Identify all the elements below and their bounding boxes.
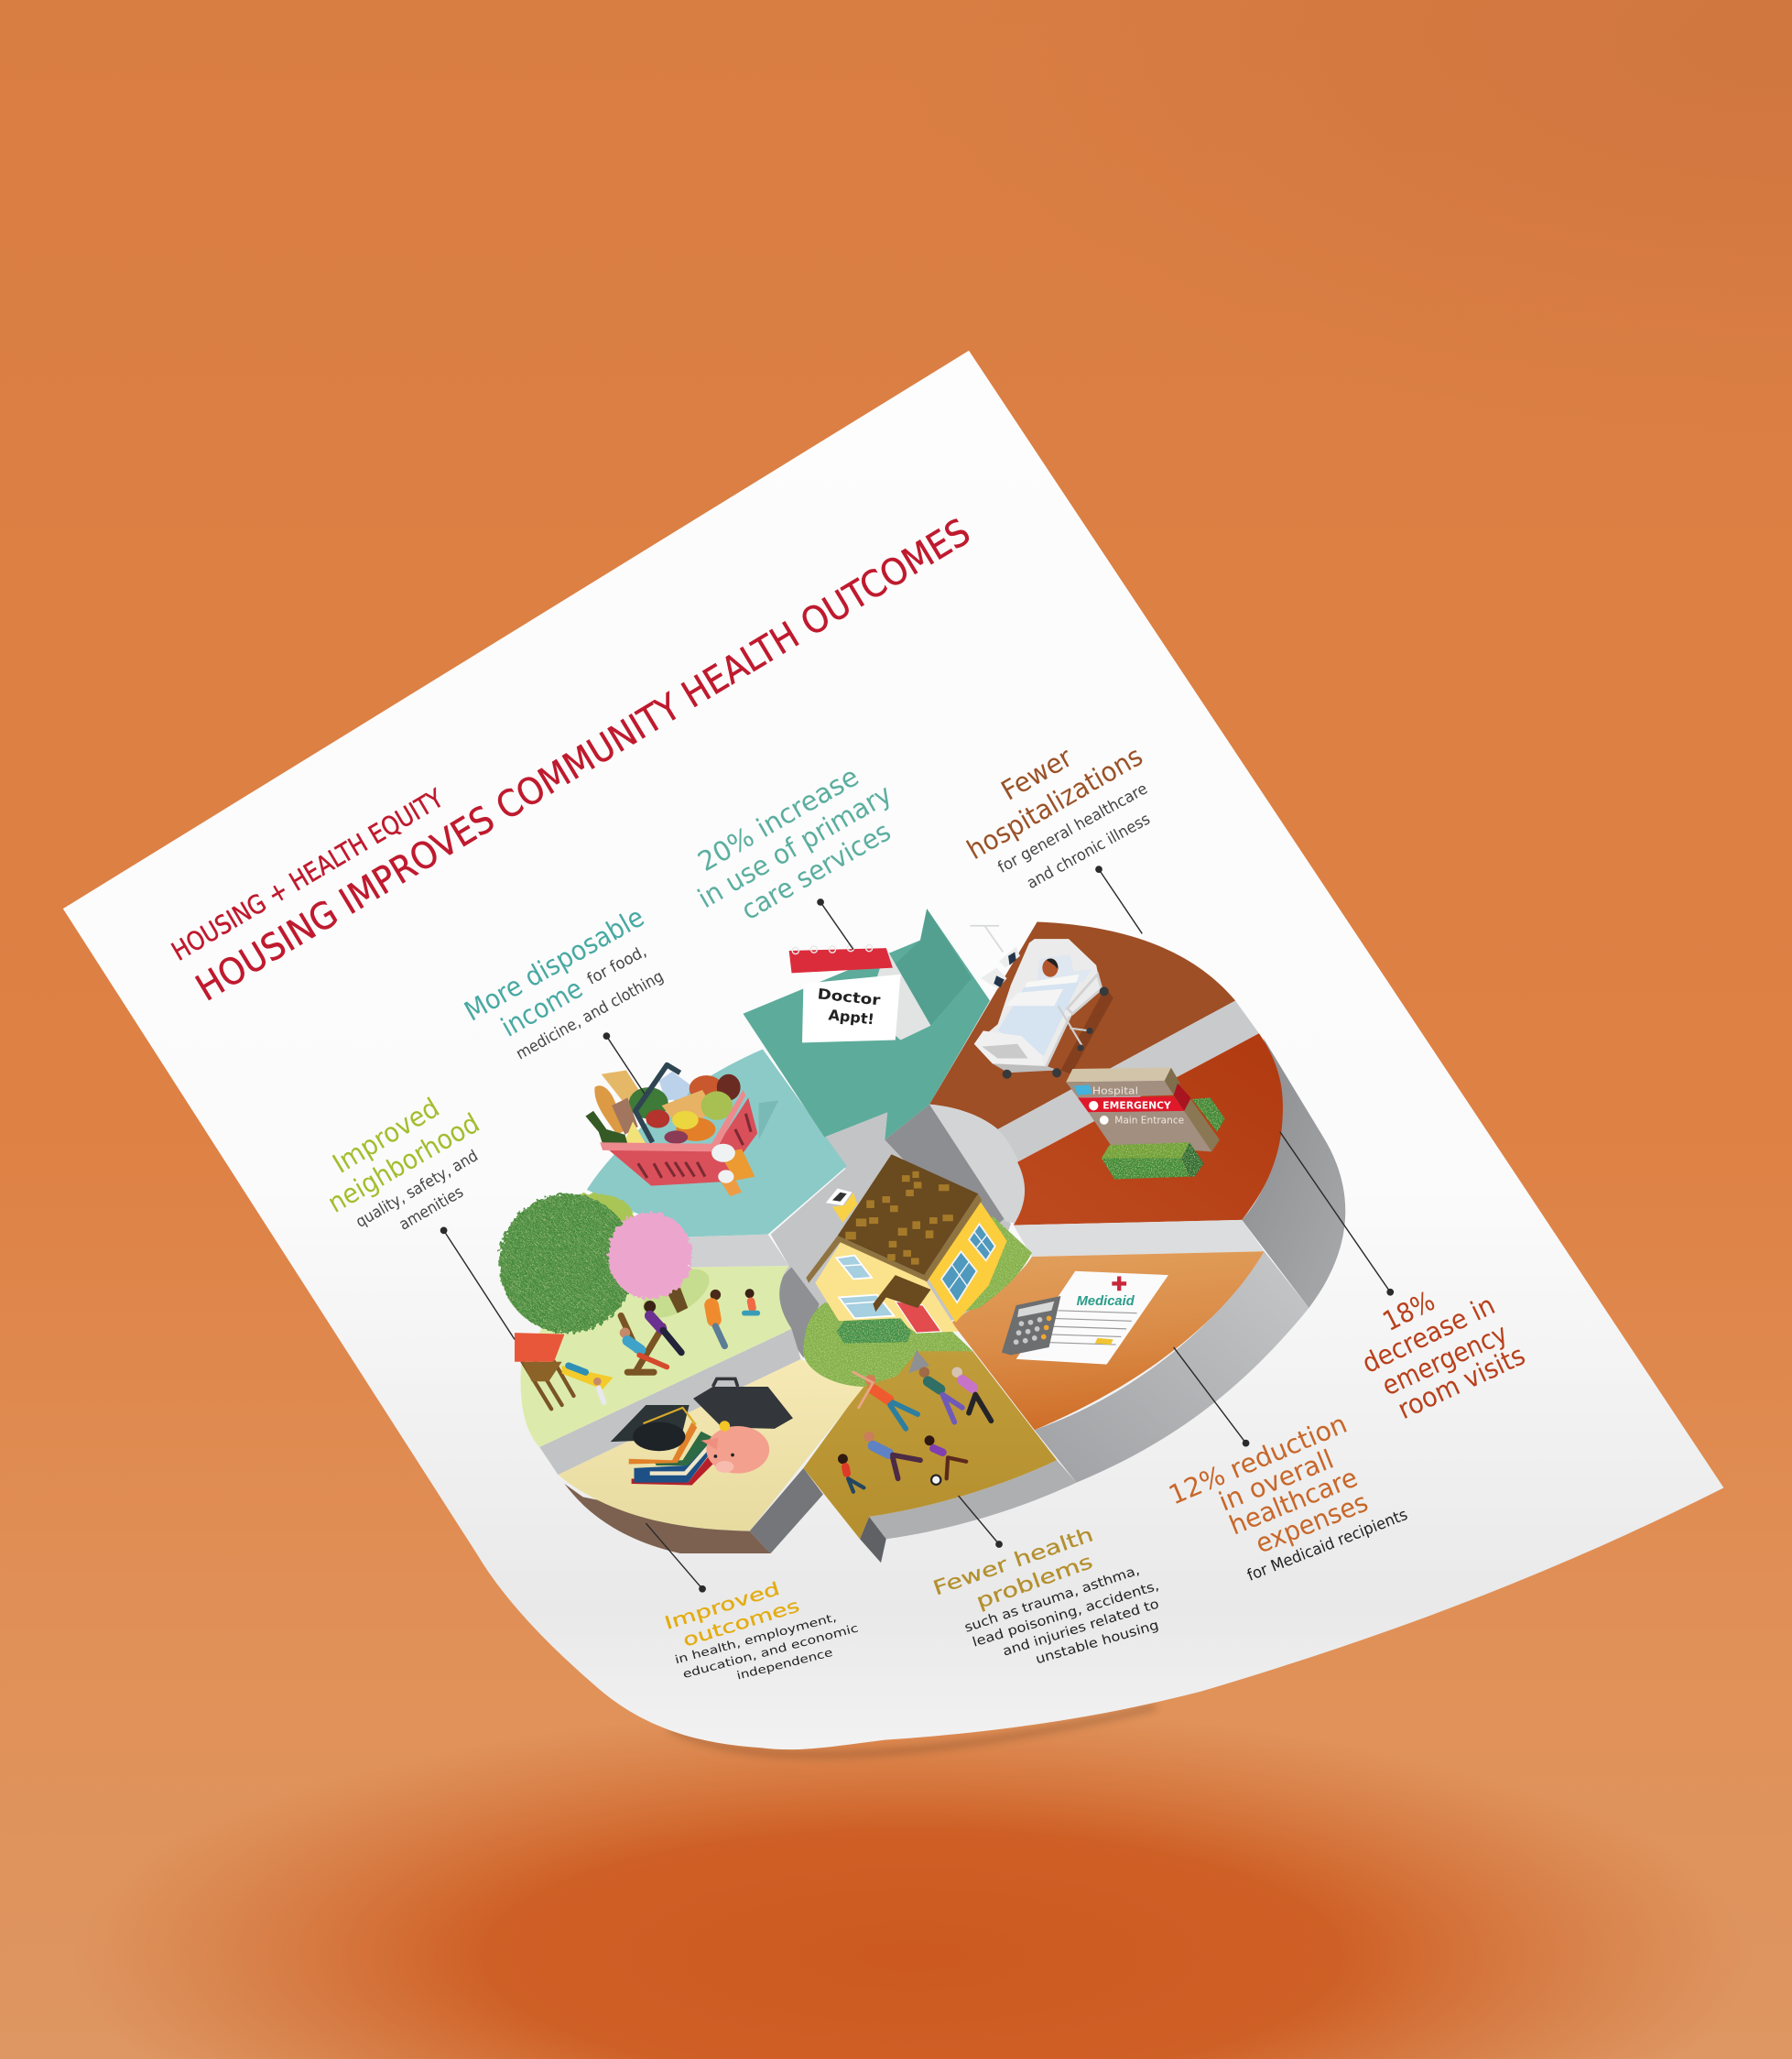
pillow bbox=[1037, 954, 1092, 985]
foot board inset bbox=[982, 1044, 1028, 1059]
lower monitor bbox=[981, 968, 1007, 989]
cap side bbox=[1165, 1068, 1180, 1095]
green apples bbox=[701, 1091, 733, 1120]
pasta bbox=[602, 1070, 642, 1106]
spiral rings bbox=[792, 945, 873, 954]
patient hair bbox=[1047, 959, 1059, 969]
icon: house bbox=[806, 1154, 1007, 1344]
body: medicine, and clothing bbox=[513, 967, 667, 1063]
oranges and veg bbox=[676, 1117, 715, 1141]
basket rim bbox=[600, 1090, 745, 1151]
paper contact shadow bbox=[669, 1707, 1156, 1755]
door bbox=[896, 1302, 941, 1333]
red sector: emergency visits bbox=[1014, 1033, 1283, 1226]
roof shingles bbox=[845, 1171, 953, 1265]
road between red and orange bbox=[1014, 1220, 1265, 1257]
Medicaid label: Medicaid bbox=[1077, 1294, 1135, 1309]
heading: 12% reduction bbox=[1164, 1408, 1352, 1510]
calculator screen bbox=[1017, 1302, 1054, 1317]
body: unstable housing bbox=[1034, 1617, 1160, 1667]
leader: hospitalizations bbox=[1096, 866, 1142, 933]
leader lines bbox=[440, 866, 1393, 1592]
callout: primary care: care services bbox=[736, 816, 896, 926]
cap top bbox=[611, 1405, 690, 1442]
light green sector: neighborhood bbox=[521, 1266, 792, 1447]
cap base bbox=[633, 1422, 685, 1451]
heading: Improved bbox=[662, 1578, 782, 1634]
paper sheet bbox=[63, 351, 1723, 1749]
briefcase bbox=[693, 1387, 793, 1429]
milk carton bbox=[659, 1072, 692, 1100]
tomato-coloured fruit bbox=[690, 1075, 723, 1102]
orange book bbox=[629, 1422, 697, 1465]
icon: graduation cap, books, briefcase, piggy bank bbox=[611, 1378, 793, 1485]
sliding kid bbox=[569, 1366, 585, 1372]
pill bottle large bbox=[711, 1144, 755, 1181]
leader: emergency bbox=[1280, 1132, 1393, 1295]
body bbox=[962, 1562, 1161, 1667]
body: for Medicaid recipients bbox=[1244, 1506, 1410, 1585]
emergency label: EMERGENCY bbox=[1102, 1100, 1171, 1112]
roof bbox=[515, 1333, 564, 1362]
arrow shadow bbox=[893, 909, 972, 1027]
pill bottle small bbox=[718, 1170, 742, 1196]
right rails bbox=[1047, 975, 1102, 1066]
kid with ball bbox=[925, 1435, 966, 1478]
canopy bbox=[499, 1193, 635, 1333]
porch roof bbox=[873, 1275, 930, 1312]
front wall bbox=[815, 1241, 959, 1333]
callout: healthcare expenses bbox=[1164, 1408, 1410, 1585]
backdrop corner shading bbox=[0, 0, 1792, 788]
lawn bbox=[803, 1216, 1032, 1387]
red header bbox=[789, 948, 893, 973]
cheese bbox=[624, 1121, 646, 1144]
pie diagram bbox=[521, 909, 1345, 1563]
heading: Improved bbox=[327, 1092, 445, 1180]
note line one: Doctor bbox=[817, 985, 882, 1009]
basket side shadow on teal bbox=[759, 1100, 778, 1139]
cherry vegetables bbox=[646, 1109, 669, 1128]
man with child bbox=[711, 1289, 757, 1346]
body: for food, bbox=[584, 942, 650, 989]
bench and sitters bbox=[620, 1301, 681, 1372]
heading: problems bbox=[973, 1551, 1096, 1614]
body: education, and economic bbox=[681, 1621, 860, 1681]
lemon bbox=[672, 1111, 699, 1129]
chimney bbox=[832, 1193, 857, 1223]
bench bbox=[621, 1316, 663, 1372]
wheels bbox=[1003, 986, 1109, 1079]
platform bbox=[523, 1362, 562, 1381]
road between teal and green bbox=[687, 1235, 789, 1267]
leader: income bbox=[603, 1033, 645, 1094]
hedge bbox=[836, 1318, 911, 1344]
roof bbox=[838, 1154, 978, 1275]
sign side bbox=[1184, 1099, 1220, 1151]
kid in red bbox=[838, 1454, 863, 1492]
yellow box bbox=[1095, 1338, 1113, 1345]
body: in health, employment, bbox=[673, 1610, 838, 1667]
under frame bbox=[993, 1063, 1059, 1073]
upper panel bbox=[1066, 1081, 1174, 1098]
dark wall of yellow sector bbox=[750, 1468, 823, 1553]
pale yellow sector: improved outcomes bbox=[558, 1359, 863, 1531]
body: such as trauma, asthma, bbox=[962, 1562, 1142, 1635]
man in blue bbox=[863, 1432, 920, 1478]
icon: hospital sign bbox=[1066, 1068, 1225, 1179]
hospital label bbox=[1074, 1084, 1138, 1096]
slide bbox=[562, 1366, 614, 1389]
heading: outcomes bbox=[680, 1595, 802, 1650]
upper front window bbox=[836, 1256, 872, 1279]
body: quality, safety, and bbox=[353, 1147, 482, 1232]
chimney hole bbox=[832, 1193, 847, 1202]
kicker heading: HOUSING + HEALTH EQUITY bbox=[167, 782, 449, 966]
monitor screens bbox=[994, 952, 1016, 987]
callout: improved neighborhood bbox=[322, 1092, 484, 1235]
gold sector: fewer health problems bbox=[803, 1350, 1057, 1539]
roof eave bbox=[806, 1193, 982, 1283]
piggy snout bbox=[715, 1461, 733, 1473]
hospital label: Hospital bbox=[1092, 1084, 1138, 1096]
blue book pages bbox=[650, 1442, 713, 1474]
lime patch bbox=[554, 1193, 633, 1236]
lower side window bbox=[941, 1251, 977, 1302]
icon: Medicaid form bbox=[1002, 1271, 1168, 1365]
body: amenities bbox=[396, 1183, 467, 1235]
legs bbox=[523, 1362, 574, 1409]
heading bbox=[662, 1578, 802, 1650]
emergency side bbox=[1174, 1084, 1190, 1111]
blue book bbox=[634, 1436, 717, 1483]
front hedge bbox=[1102, 1142, 1204, 1179]
road between green and yellow bbox=[539, 1329, 801, 1475]
heading: neighborhood bbox=[322, 1107, 484, 1219]
icon: grocery basket bbox=[585, 1065, 757, 1196]
overbed table bbox=[1005, 989, 1063, 1006]
curved hub road bbox=[929, 1105, 1026, 1224]
form sheet bbox=[1016, 1271, 1168, 1365]
callout: fewer health problems bbox=[930, 1523, 1161, 1667]
red book bbox=[632, 1445, 717, 1485]
soccer ball bbox=[931, 1476, 940, 1485]
upper side window bbox=[969, 1224, 995, 1260]
child bbox=[744, 1289, 757, 1313]
lawn kid bbox=[593, 1378, 604, 1402]
front lawn bbox=[803, 1300, 972, 1387]
orange sector: healthcare expenses bbox=[951, 1251, 1265, 1430]
callout: emergency visits: 18% bbox=[1378, 1285, 1439, 1337]
leader: neighborhood bbox=[440, 1227, 515, 1339]
side wall bbox=[927, 1200, 1007, 1323]
small gray arrow tip bbox=[908, 1350, 929, 1374]
older man bbox=[919, 1367, 962, 1422]
lower right wall bbox=[1035, 1251, 1309, 1483]
dark teal arrow sector bbox=[743, 909, 990, 1139]
green book bbox=[654, 1432, 714, 1465]
bed base bbox=[974, 939, 1102, 1066]
main entrance label: Main Entrance bbox=[1114, 1115, 1185, 1127]
leader: primary care bbox=[818, 899, 853, 950]
heading: hospitalizations bbox=[961, 740, 1148, 866]
table arm bbox=[1059, 1006, 1090, 1045]
red cross bbox=[1112, 1277, 1126, 1291]
piggy ear bbox=[701, 1438, 718, 1450]
handwritten note bbox=[815, 985, 882, 1029]
form rows bbox=[1037, 1311, 1137, 1345]
shrub behind sign bbox=[1192, 1098, 1225, 1132]
tree: pink canopy bbox=[608, 1212, 692, 1299]
body: independence bbox=[735, 1645, 834, 1683]
white sheet bbox=[1024, 975, 1079, 993]
tree trunk bbox=[667, 1287, 688, 1313]
lower front window bbox=[839, 1295, 894, 1318]
callout: emergency visits bbox=[1357, 1285, 1530, 1425]
main title: HOUSING IMPROVES COMMUNITY HEALTH OUTCOMES bbox=[190, 511, 977, 1009]
standing woman bbox=[644, 1301, 681, 1353]
man bbox=[711, 1290, 724, 1346]
heading bbox=[1164, 1408, 1373, 1560]
tassel bbox=[644, 1408, 696, 1425]
callout: primary care: 20% increase bbox=[692, 760, 863, 877]
body: for general healthcare bbox=[995, 779, 1151, 877]
floor shadow bbox=[0, 1575, 1792, 2059]
brown sector: fewer hospitalizations bbox=[929, 921, 1235, 1129]
icon: hospital bed bbox=[971, 926, 1113, 1079]
treehouse bbox=[515, 1333, 614, 1409]
note page bbox=[802, 975, 901, 1042]
seated person bbox=[620, 1327, 667, 1367]
chimney cap bbox=[826, 1188, 852, 1205]
body: and chronic illness bbox=[1024, 810, 1154, 893]
light teal sector bbox=[587, 1050, 847, 1237]
heading: More disposable bbox=[459, 901, 649, 1027]
callout: primary care: in use of primary bbox=[692, 779, 897, 914]
IV pole bbox=[971, 926, 1003, 952]
leader: expenses bbox=[1174, 1347, 1249, 1446]
heading: Fewer bbox=[996, 741, 1078, 807]
tree shadow on lawn bbox=[635, 1259, 717, 1328]
upper monitor bbox=[999, 947, 1020, 968]
foot board bbox=[974, 1030, 1044, 1065]
basket slots bbox=[638, 1114, 751, 1178]
beet bbox=[664, 1130, 688, 1144]
calculator keys bbox=[1014, 1316, 1051, 1345]
baguette bbox=[594, 1085, 627, 1135]
callout: emergency visits: emergency bbox=[1377, 1318, 1512, 1401]
greens bbox=[629, 1087, 668, 1118]
central gray hub bbox=[771, 1105, 1011, 1357]
back pages bbox=[866, 948, 930, 1040]
heading: expenses bbox=[1251, 1487, 1373, 1560]
sign cap bbox=[1066, 1068, 1171, 1082]
lower panel bbox=[1089, 1111, 1211, 1151]
hub curved wall bbox=[775, 1267, 820, 1357]
leader: health problems bbox=[959, 1496, 1002, 1547]
calculator bbox=[1002, 1296, 1060, 1356]
older woman bbox=[951, 1367, 991, 1421]
bed shadow bbox=[1060, 987, 1113, 1074]
briefcase handle bbox=[713, 1378, 738, 1387]
patient head bbox=[1042, 959, 1059, 977]
callout: fewer hospitalizations bbox=[961, 740, 1154, 893]
hub dark wall bbox=[885, 1105, 1005, 1241]
note line two: Appt! bbox=[828, 1006, 875, 1028]
sausage bbox=[612, 1098, 638, 1135]
handle bbox=[635, 1065, 680, 1142]
callout: emergency visits: room visits bbox=[1393, 1339, 1530, 1425]
brown underside bbox=[564, 1484, 771, 1553]
body: lead poisoning, accidents, bbox=[971, 1577, 1161, 1650]
side lawn bbox=[959, 1216, 1032, 1313]
people playing bbox=[838, 1367, 991, 1492]
chocolate salami bbox=[717, 1074, 741, 1100]
heading: Fewer health bbox=[930, 1523, 1096, 1600]
basket body bbox=[609, 1098, 757, 1186]
callout: emergency visits: decrease in bbox=[1357, 1290, 1500, 1379]
title block bbox=[167, 511, 977, 1009]
road between brown and red bbox=[998, 1000, 1259, 1162]
stretching woman bbox=[853, 1372, 918, 1429]
coin bbox=[720, 1421, 730, 1432]
leader: outcomes bbox=[646, 1523, 705, 1592]
lower wall under gold sector bbox=[869, 1460, 1077, 1539]
tree: green canopy bbox=[499, 1193, 635, 1333]
icon: calendar bbox=[789, 945, 930, 1042]
heading: income bbox=[496, 973, 588, 1043]
callout: improved outcomes bbox=[662, 1578, 860, 1683]
wine bottle bbox=[585, 1111, 627, 1144]
heading: healthcare bbox=[1225, 1462, 1362, 1541]
mattress blanket bbox=[998, 982, 1079, 1056]
piggy body bbox=[706, 1426, 769, 1474]
body: and injuries related to bbox=[1001, 1596, 1161, 1659]
heading: in overall bbox=[1214, 1443, 1338, 1518]
dark outer wall right bbox=[1242, 1038, 1345, 1308]
wall end cap bbox=[860, 1517, 886, 1563]
callout: more disposable income bbox=[459, 901, 667, 1063]
emergency band bbox=[1078, 1096, 1184, 1112]
piggy eyes bbox=[714, 1454, 734, 1458]
box of food bbox=[662, 1090, 714, 1132]
